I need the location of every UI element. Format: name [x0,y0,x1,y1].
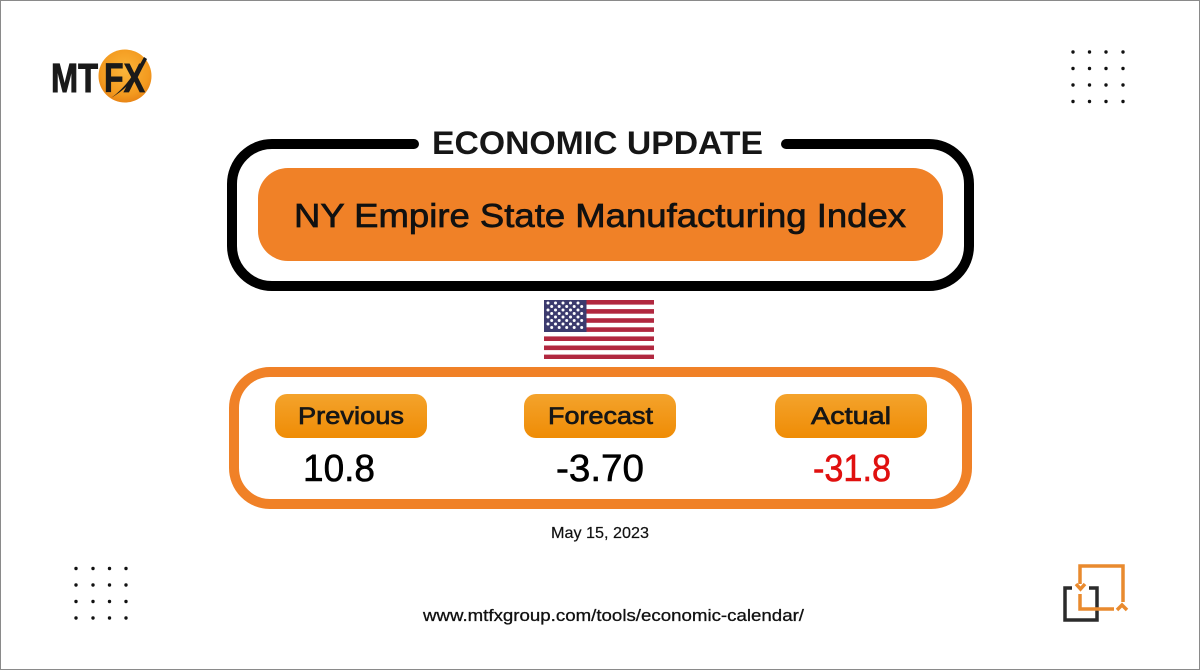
value: forecast: -3.70 [556,448,644,490]
icon: US flag [544,300,654,359]
decorative dot grid: bottom left [74,567,128,620]
title banner: NY Empire State Manufacturing Index [294,197,907,234]
value: previous: 10.8 [303,448,375,490]
website url: www.mtfxgroup.com/tools/economic-calendar/ [422,606,804,625]
logo: MTFX: MT [51,55,98,101]
logo: MTFX [51,50,152,102]
value: actual: -31.8 [813,448,891,490]
panel: data frame [234,372,967,504]
label: forecast [524,394,676,438]
decorative dot grid: top right [1071,50,1125,103]
label: forecast: Forecast [548,403,653,430]
label: actual: Actual [811,403,891,430]
logo: MTFX: FX [104,55,145,101]
date: May 15, 2023 [551,525,649,542]
panel: title frame [232,144,969,286]
label: actual [775,394,927,438]
label: previous [275,394,427,438]
icon: overlapping squares [1065,566,1127,620]
title banner [258,168,943,261]
heading: economic update: ECONOMIC UPDATE [432,125,763,161]
label: previous: Previous [298,403,404,430]
